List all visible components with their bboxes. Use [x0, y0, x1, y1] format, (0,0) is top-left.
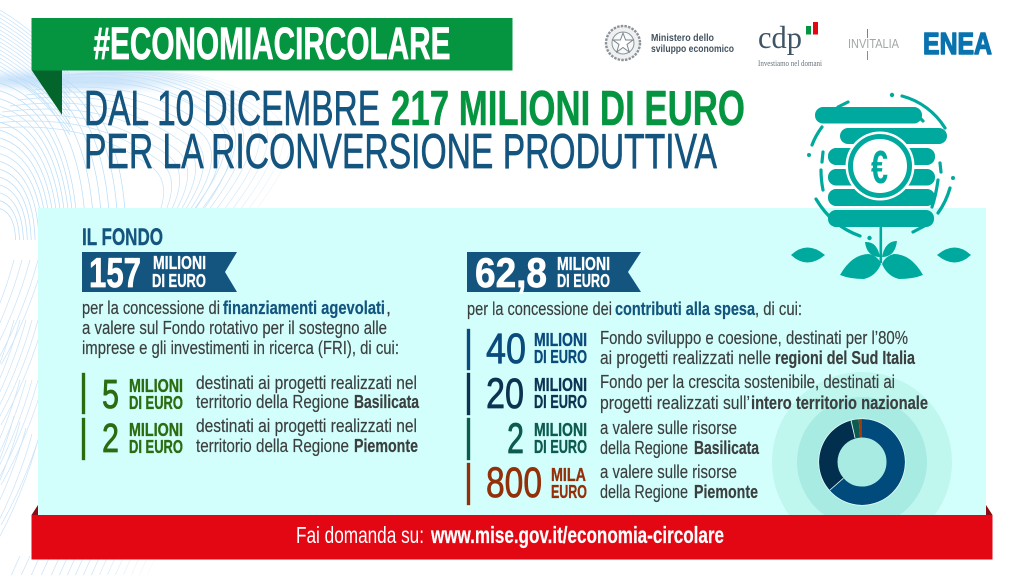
item: 40 milioni: 40: [486, 325, 526, 373]
title: PER LA RICONVERSIONE PRODUTTIVA: [84, 125, 717, 179]
text block: contributi alla spesa: per la concessione dei: [467, 299, 612, 319]
item: 20 milioni: [467, 370, 928, 418]
item: 2 milioni Basilicata: DI EURO: [534, 437, 587, 457]
item: 2 milioni Piemonte: 2: [102, 415, 119, 461]
text block: contributi alla spesa: [467, 299, 802, 319]
item: 5 milioni Basilicata: DI EURO: [129, 393, 183, 413]
item: 2 milioni Basilicata: a valere sulle risorse: [600, 418, 737, 438]
ribbon: 62,8 milioni di euro: DI EURO: [557, 271, 610, 291]
item: 2 milioni Basilicata: MILIONI: [534, 420, 587, 440]
euro coin: €: [871, 141, 888, 193]
logo: cdp: cdp: [758, 19, 802, 55]
ribbon: 157 milioni di euro: DI EURO: [152, 271, 206, 291]
text block: finanziamenti agevolati: imprese e gli investimenti in ricerca (FRI), di cui:: [82, 338, 399, 358]
logo: Invitalia: INVITALIA: [848, 36, 899, 51]
text block: finanziamenti agevolati: ,: [386, 298, 391, 318]
item: 5 milioni Basilicata: territorio della Regione: [196, 392, 349, 412]
item: 20 milioni: DI EURO: [534, 392, 587, 412]
logo: ENEA: ENEA: [923, 27, 992, 61]
item: 2 milioni Basilicata: 2: [507, 415, 524, 463]
item: 5 milioni Basilicata: 5: [102, 371, 119, 417]
item: 5 milioni Basilicata: [82, 371, 420, 417]
item: 40 milioni: regioni del Sud Italia: [775, 348, 916, 368]
item: 2 milioni Basilicata: della Regione: [600, 438, 688, 458]
logo: cdp: [758, 19, 823, 68]
item: 2 milioni Piemonte: MILIONI: [129, 420, 183, 440]
item: 20 milioni: progetti realizzati sull’: [600, 393, 750, 413]
item: 2 milioni Piemonte: [82, 415, 418, 461]
item: 40 milioni: ai progetti realizzati nelle: [600, 348, 771, 368]
text block: finanziamenti agevolati: per la concessione di: [82, 298, 220, 318]
hashtag banner: [32, 18, 512, 115]
item: 20 milioni: MILIONI: [534, 375, 587, 395]
item: 800 mila euro: MILA: [551, 465, 586, 485]
stacked coin bars: [815, 107, 947, 227]
item: 40 milioni: MILIONI: [534, 330, 587, 350]
footer call to action: Fai domanda su:: [296, 522, 424, 548]
footer call to action: www.mise.gov.it/economia-circolare: [430, 522, 724, 548]
ribbon: 157 milioni di euro: [82, 249, 237, 296]
orbit arcs and dots: [812, 96, 950, 236]
ribbon: 62,8 milioni di euro: 62,8: [475, 249, 547, 296]
item: 800 mila euro: a valere sulle risorse: [600, 462, 737, 482]
item: 2 milioni Piemonte: territorio della Regione: [196, 436, 349, 456]
text block: finanziamenti agevolati: [82, 298, 399, 358]
logo: cdp: Investiamo nel domani: [758, 59, 823, 68]
logo: Ministero dello sviluppo economico: Ministero dello: [651, 32, 714, 44]
text block: contributi alla spesa: , di cui:: [755, 299, 802, 319]
ribbon: 157 milioni di euro: 157: [89, 249, 141, 296]
item: 800 mila euro: 800: [486, 459, 542, 507]
item: 20 milioni: Fondo per la crescita sostenibile, destinati ai: [600, 372, 895, 392]
euro coin: [846, 132, 914, 200]
logo: Invitalia: [848, 29, 899, 60]
item: 2 milioni Piemonte: DI EURO: [129, 437, 183, 457]
text block: finanziamenti agevolati: finanziamenti agevolati: [223, 298, 385, 318]
text block: contributi alla spesa: contributi alla spesa: [615, 299, 756, 319]
item: 800 mila euro: della Regione: [600, 482, 688, 502]
item: 20 milioni: 20: [486, 370, 524, 418]
ribbon: 157 milioni di euro: MILIONI: [153, 253, 206, 273]
item: 20 milioni: intero territorio nazionale: [751, 393, 928, 413]
icon: coin plant: [791, 93, 971, 279]
logo: Ministero dello sviluppo economico: [606, 26, 734, 60]
item: 2 milioni Basilicata: [467, 415, 760, 463]
item: 800 mila euro: [467, 459, 758, 507]
heading: il fondo: IL FONDO: [82, 224, 163, 251]
item: 800 mila euro: EURO: [551, 482, 587, 502]
ribbon: 62,8 milioni di euro: [467, 249, 641, 296]
hashtag banner: #ECONOMIACIRCOLARE: [94, 18, 450, 69]
title: 217 MILIONI DI EURO: [391, 82, 745, 136]
item: 40 milioni: Fondo sviluppo e coesione, destinati per l’80%: [600, 328, 908, 348]
item: 5 milioni Basilicata: MILIONI: [129, 376, 183, 396]
footer call to action: [32, 505, 992, 560]
item: 2 milioni Piemonte: destinati ai progetti realizzati nel: [196, 416, 417, 436]
ribbon: 62,8 milioni di euro: MILIONI: [557, 254, 610, 274]
text block: finanziamenti agevolati: a valere sul Fondo rotativo per il sostegno alle: [82, 318, 387, 338]
title: DAL 10 DICEMBRE: [84, 82, 380, 136]
item: 40 milioni: [467, 325, 916, 373]
item: 800 mila euro: Piemonte: [694, 482, 758, 502]
logo: Ministero dello sviluppo economico: sviluppo economico: [651, 43, 734, 55]
item: 5 milioni Basilicata: destinati ai progetti realizzati nel: [196, 373, 417, 393]
leaves: [791, 241, 971, 279]
item: 2 milioni Piemonte: Piemonte: [354, 436, 418, 456]
stem: [880, 227, 882, 263]
item: 2 milioni Basilicata: Basilicata: [694, 438, 760, 458]
title: [84, 82, 745, 179]
donut chart with halo: [772, 372, 952, 552]
item: 5 milioni Basilicata: Basilicata: [354, 392, 420, 412]
item: 40 milioni: DI EURO: [534, 347, 587, 367]
panel: fund details background: [38, 208, 986, 515]
